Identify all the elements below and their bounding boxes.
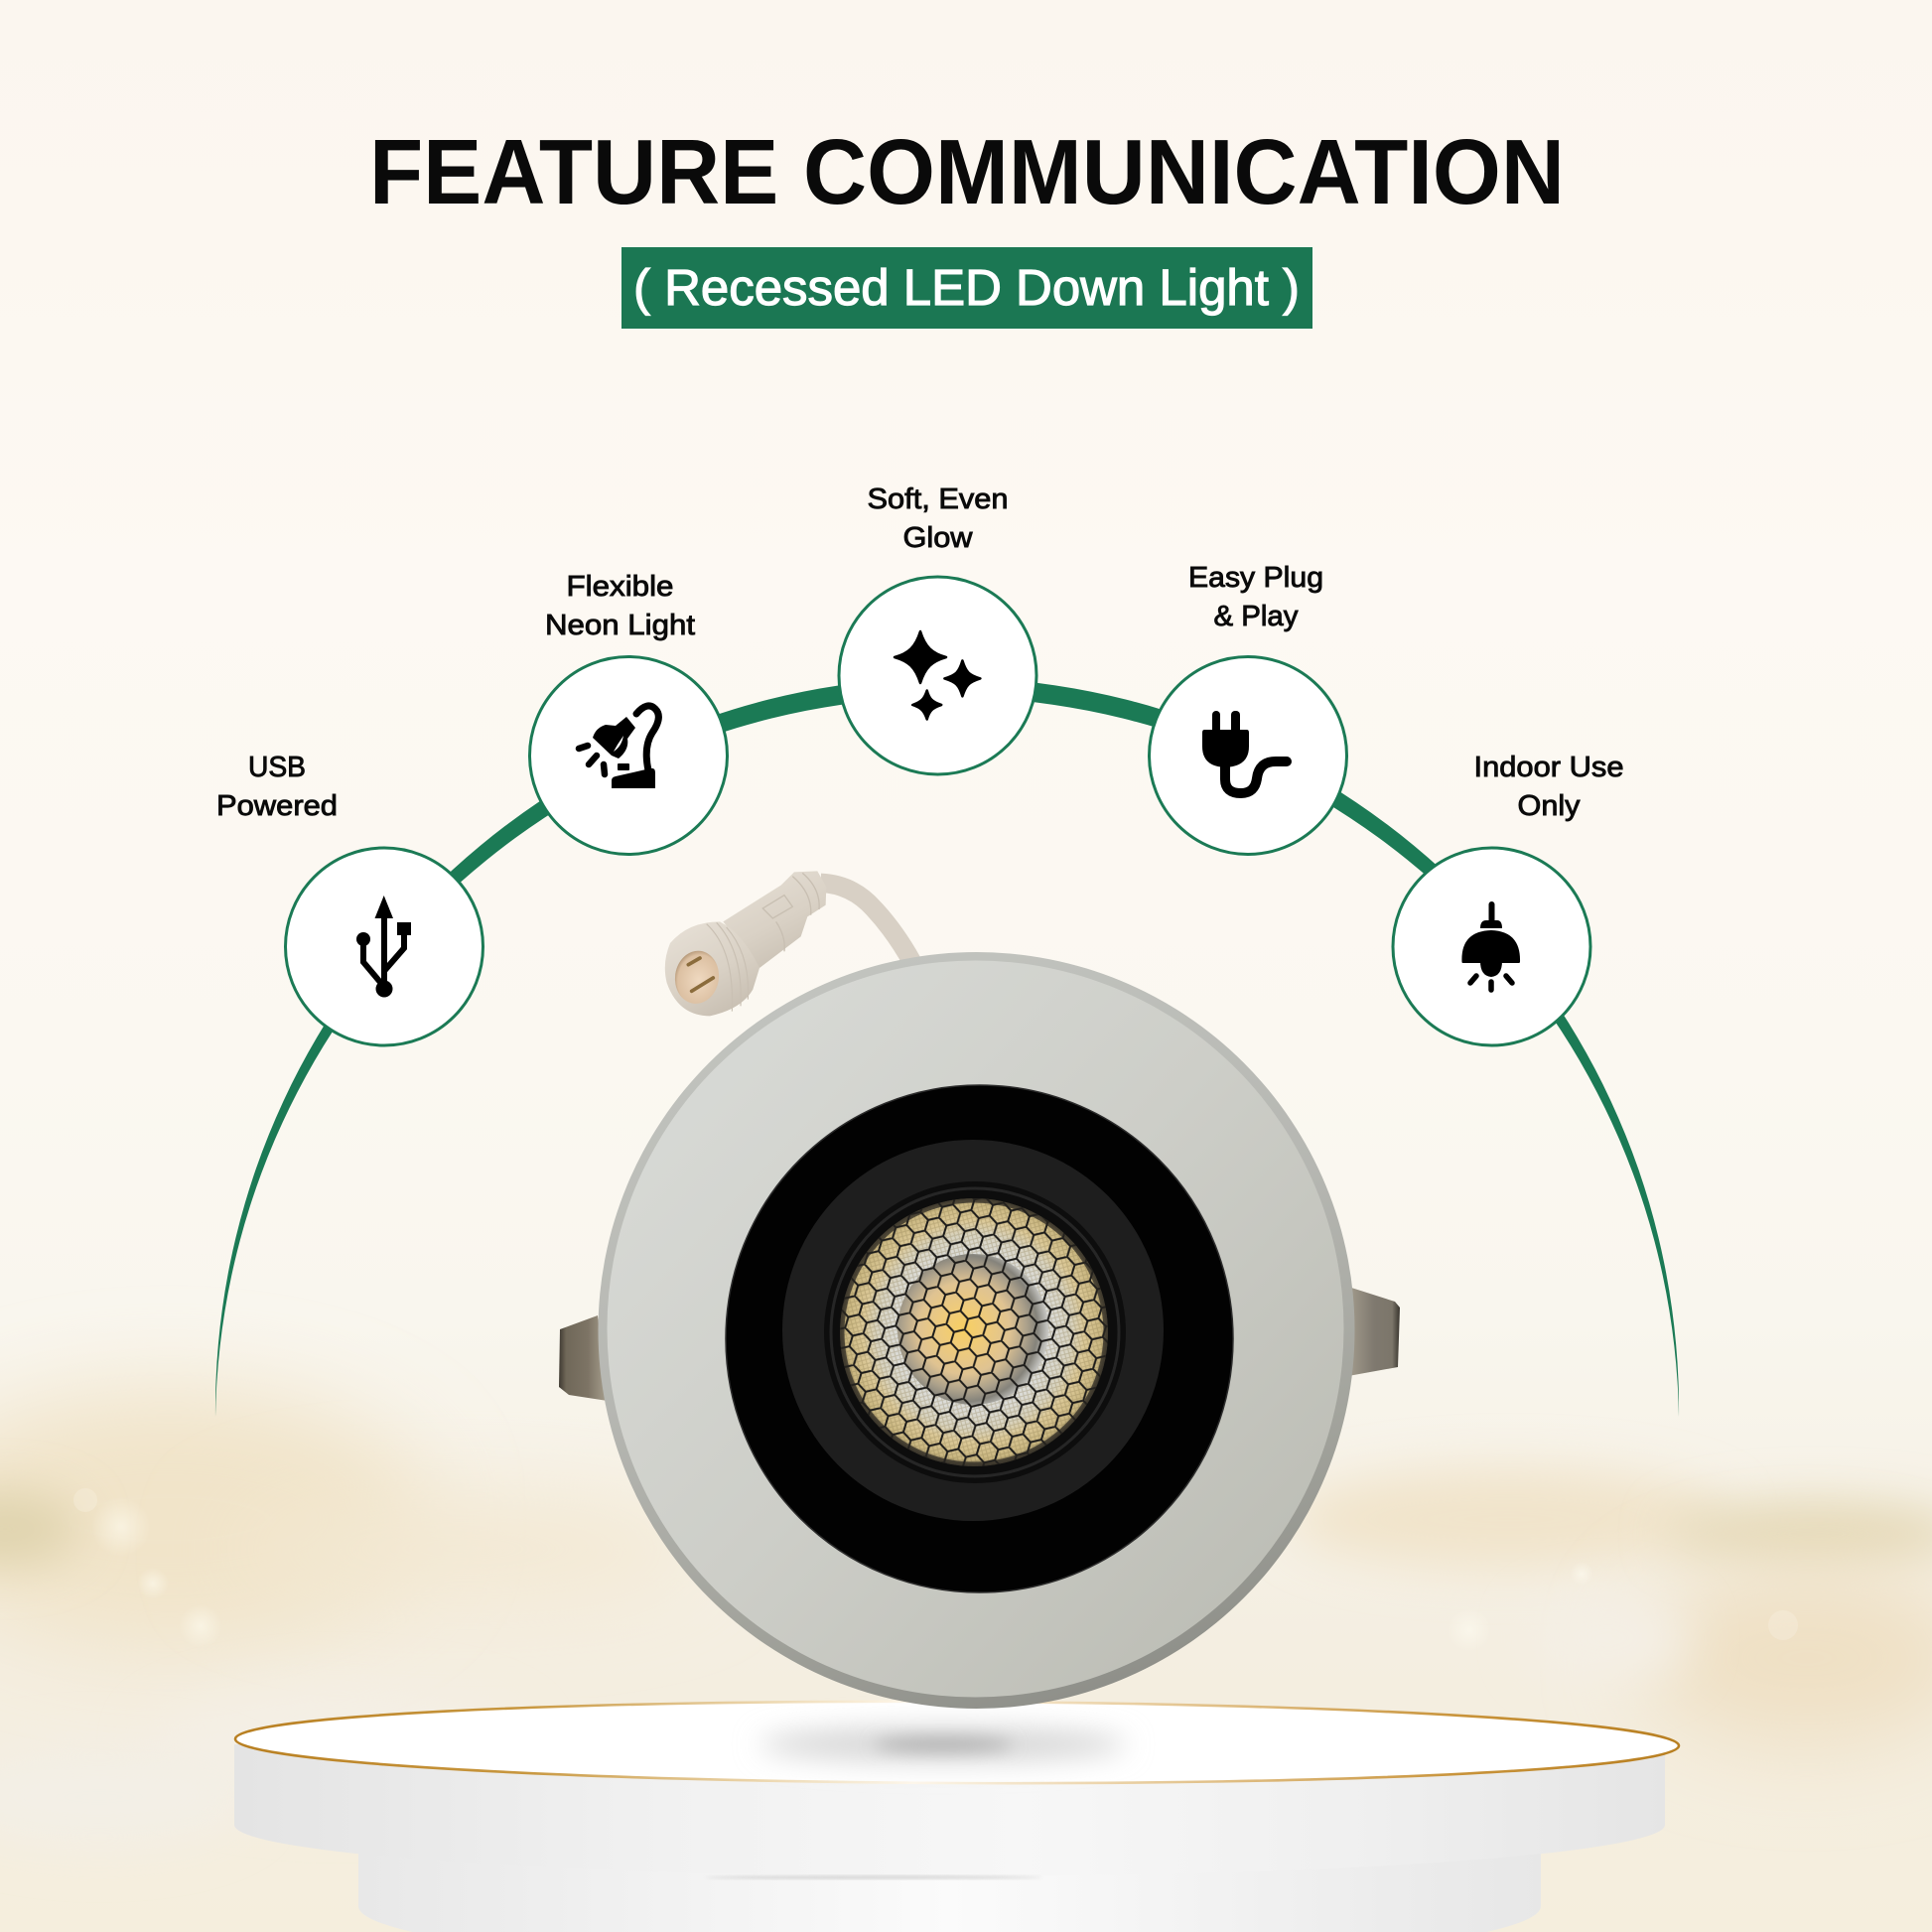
label: [868, 483, 1009, 554]
label: Neon Light: [545, 610, 695, 641]
feature: USB Powered: [216, 752, 483, 1045]
label: Soft, Even: [868, 483, 1009, 515]
outer rim: [598, 952, 1354, 1709]
circle: [1150, 657, 1346, 854]
label: USB: [248, 752, 306, 783]
icon: desk lamp: [579, 706, 658, 788]
label: & Play: [1213, 601, 1299, 632]
label: [545, 571, 695, 641]
feature: Soft, Even Glow: [839, 483, 1036, 774]
label: Powered: [216, 790, 338, 822]
circle: [286, 848, 483, 1045]
label: [1473, 752, 1624, 822]
label: [1188, 562, 1323, 632]
icon: pendant lamp: [1461, 901, 1520, 990]
circle: [1393, 848, 1590, 1045]
label: Indoor Use: [1473, 752, 1624, 783]
honeycomb lens: [840, 1198, 1108, 1466]
icon: plug: [1202, 711, 1287, 793]
label: [216, 752, 338, 822]
product: recessed LED down light: [559, 871, 1400, 1709]
subtitle badge: [621, 247, 1312, 329]
podium top surface: [235, 1699, 1679, 1786]
trim face: [608, 961, 1344, 1698]
connector cable: [665, 871, 911, 1016]
icon: sparkles: [895, 631, 980, 719]
podium upper tier: [234, 1744, 1665, 1876]
mounting clip right: [1348, 1287, 1400, 1376]
label: Flexible: [566, 571, 673, 603]
circle: [530, 657, 727, 854]
label: Only: [1517, 790, 1581, 822]
subtitle badge: ( Recessed LED Down Light ): [633, 259, 1300, 316]
black baffle: [726, 1085, 1233, 1592]
contact shadow: [759, 1727, 1127, 1761]
feature: Flexible Neon Light: [530, 571, 727, 854]
circle: [839, 577, 1036, 774]
mounting clip left: [559, 1315, 608, 1401]
label: Easy Plug: [1188, 562, 1323, 594]
icon: usb: [356, 896, 411, 997]
label: Glow: [903, 522, 974, 554]
green arc: [215, 677, 1679, 1417]
podium lower tier: [358, 1847, 1541, 1932]
feature: Easy Plug & Play: [1150, 562, 1346, 854]
podium platform: [234, 1699, 1679, 1932]
title: FEATURE COMMUNICATION: [369, 120, 1565, 223]
feature: Indoor Use Only: [1393, 752, 1624, 1045]
inner dark ring: [782, 1140, 1164, 1521]
